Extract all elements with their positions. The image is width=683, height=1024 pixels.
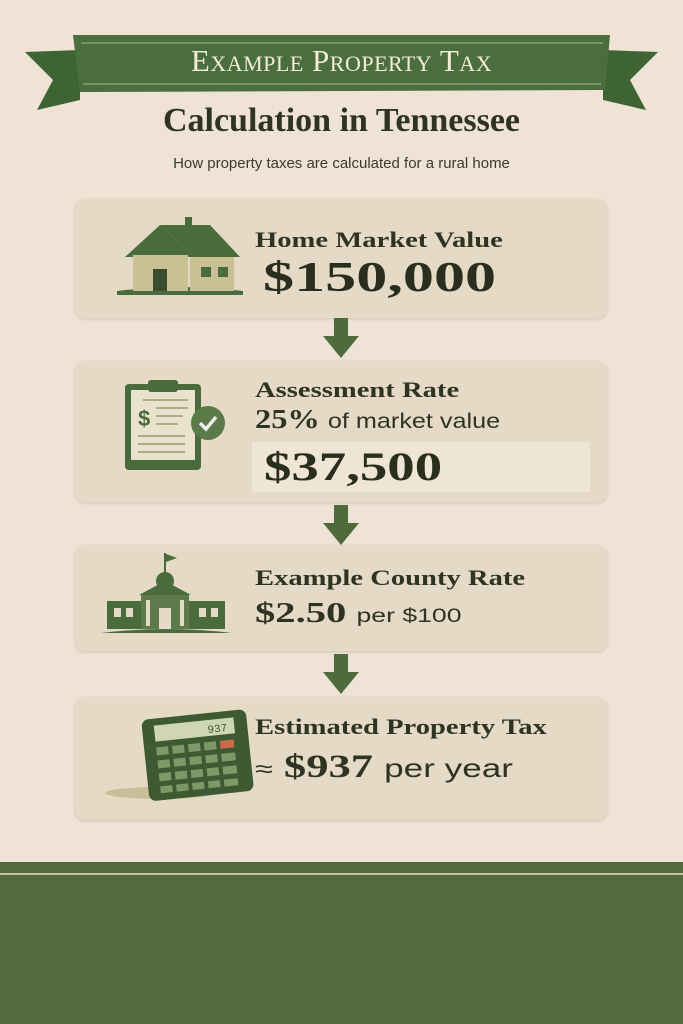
- footer band: [0, 862, 683, 1024]
- label: Estimated Property Tax: [255, 714, 547, 739]
- panel: assessment rate: [75, 361, 607, 502]
- rate: $2.50 per $100: [255, 597, 462, 629]
- label: Home Market Value: [255, 227, 503, 252]
- tax value: ≈ $937 per year: [255, 749, 513, 785]
- assessed value: $37,500: [264, 444, 442, 489]
- banner ribbon: [25, 35, 658, 110]
- subtitle heading: Calculation in Tennessee: [163, 102, 520, 139]
- panel: estimated tax: [75, 697, 607, 820]
- panel: home market value: [75, 199, 607, 318]
- icon: calculator: 937: [207, 723, 228, 737]
- icon: clipboard: [125, 380, 225, 470]
- assessed value: [252, 442, 590, 492]
- icon: calculator: [105, 710, 254, 801]
- description: How property taxes are calculated for a rural home: [173, 155, 510, 172]
- banner title: Example Property Tax: [191, 43, 492, 78]
- label: Example County Rate: [255, 565, 525, 590]
- arrow: [323, 505, 359, 545]
- value: $150,000: [263, 255, 496, 301]
- percent: 25% of market value: [255, 404, 500, 434]
- panel: county rate: [75, 545, 607, 651]
- icon: house: [117, 217, 243, 295]
- icon: courthouse: [102, 553, 232, 633]
- arrow: [323, 654, 359, 694]
- label: Assessment Rate: [255, 377, 459, 402]
- icon: clipboard: $: [138, 406, 150, 431]
- arrow: [323, 318, 359, 358]
